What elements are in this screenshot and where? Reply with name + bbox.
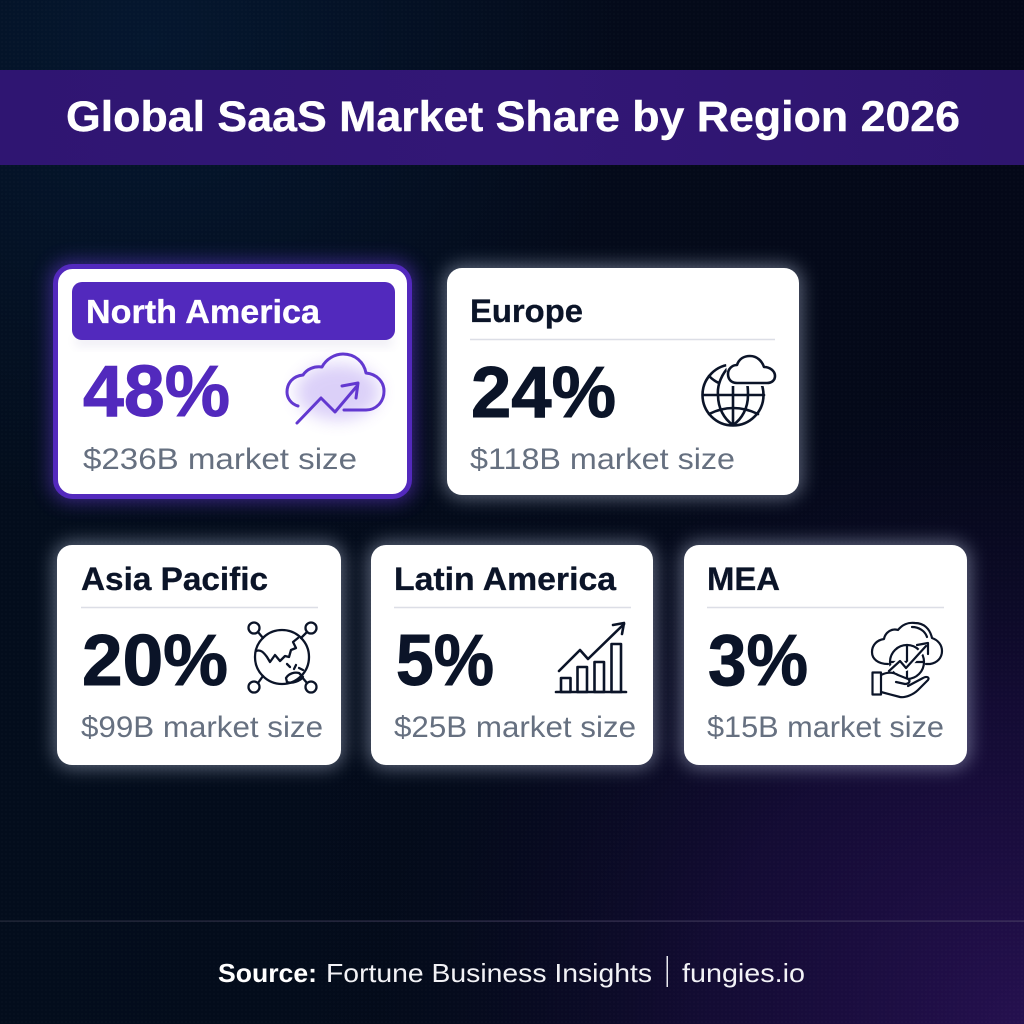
region name: Latin America (394, 561, 616, 597)
panel: Latin America (368, 542, 656, 768)
share value: 5% (396, 621, 494, 701)
panel: Europe (444, 265, 802, 498)
region name: Europe (470, 293, 583, 329)
icon: cloud with rising arrow (287, 354, 384, 423)
market size: $236B market size (83, 443, 357, 476)
region header pill (72, 282, 395, 340)
footer source line: Source: (218, 958, 317, 988)
title: Global SaaS Market Share by Region 2026 (66, 93, 960, 141)
title banner (0, 70, 1024, 165)
share value: 3% (708, 621, 808, 701)
market size: $118B market size (470, 443, 735, 476)
icon: connected globe (248, 622, 316, 692)
footer source line: fungies.io (682, 958, 805, 988)
footer source line (218, 956, 805, 988)
share value: 20% (82, 621, 228, 701)
region name: Asia Pacific (81, 561, 268, 597)
icon: hand holding cloud and globe (872, 623, 942, 697)
panel: MEA (681, 542, 970, 768)
share value: 48% (83, 352, 230, 432)
market size: $15B market size (707, 711, 944, 744)
panel: North America (50, 261, 415, 502)
icon: globe with cloud (702, 352, 780, 426)
share value: 24% (471, 353, 616, 433)
icon: bar chart with arrow (556, 623, 626, 692)
footer divider (0, 920, 1024, 922)
region header pill: North America (86, 293, 321, 330)
panel: Asia Pacific (54, 542, 344, 768)
market size: $25B market size (394, 711, 636, 744)
region name: MEA (707, 561, 780, 597)
market size: $99B market size (81, 711, 323, 744)
footer source line: Fortune Business Insights (326, 958, 652, 988)
